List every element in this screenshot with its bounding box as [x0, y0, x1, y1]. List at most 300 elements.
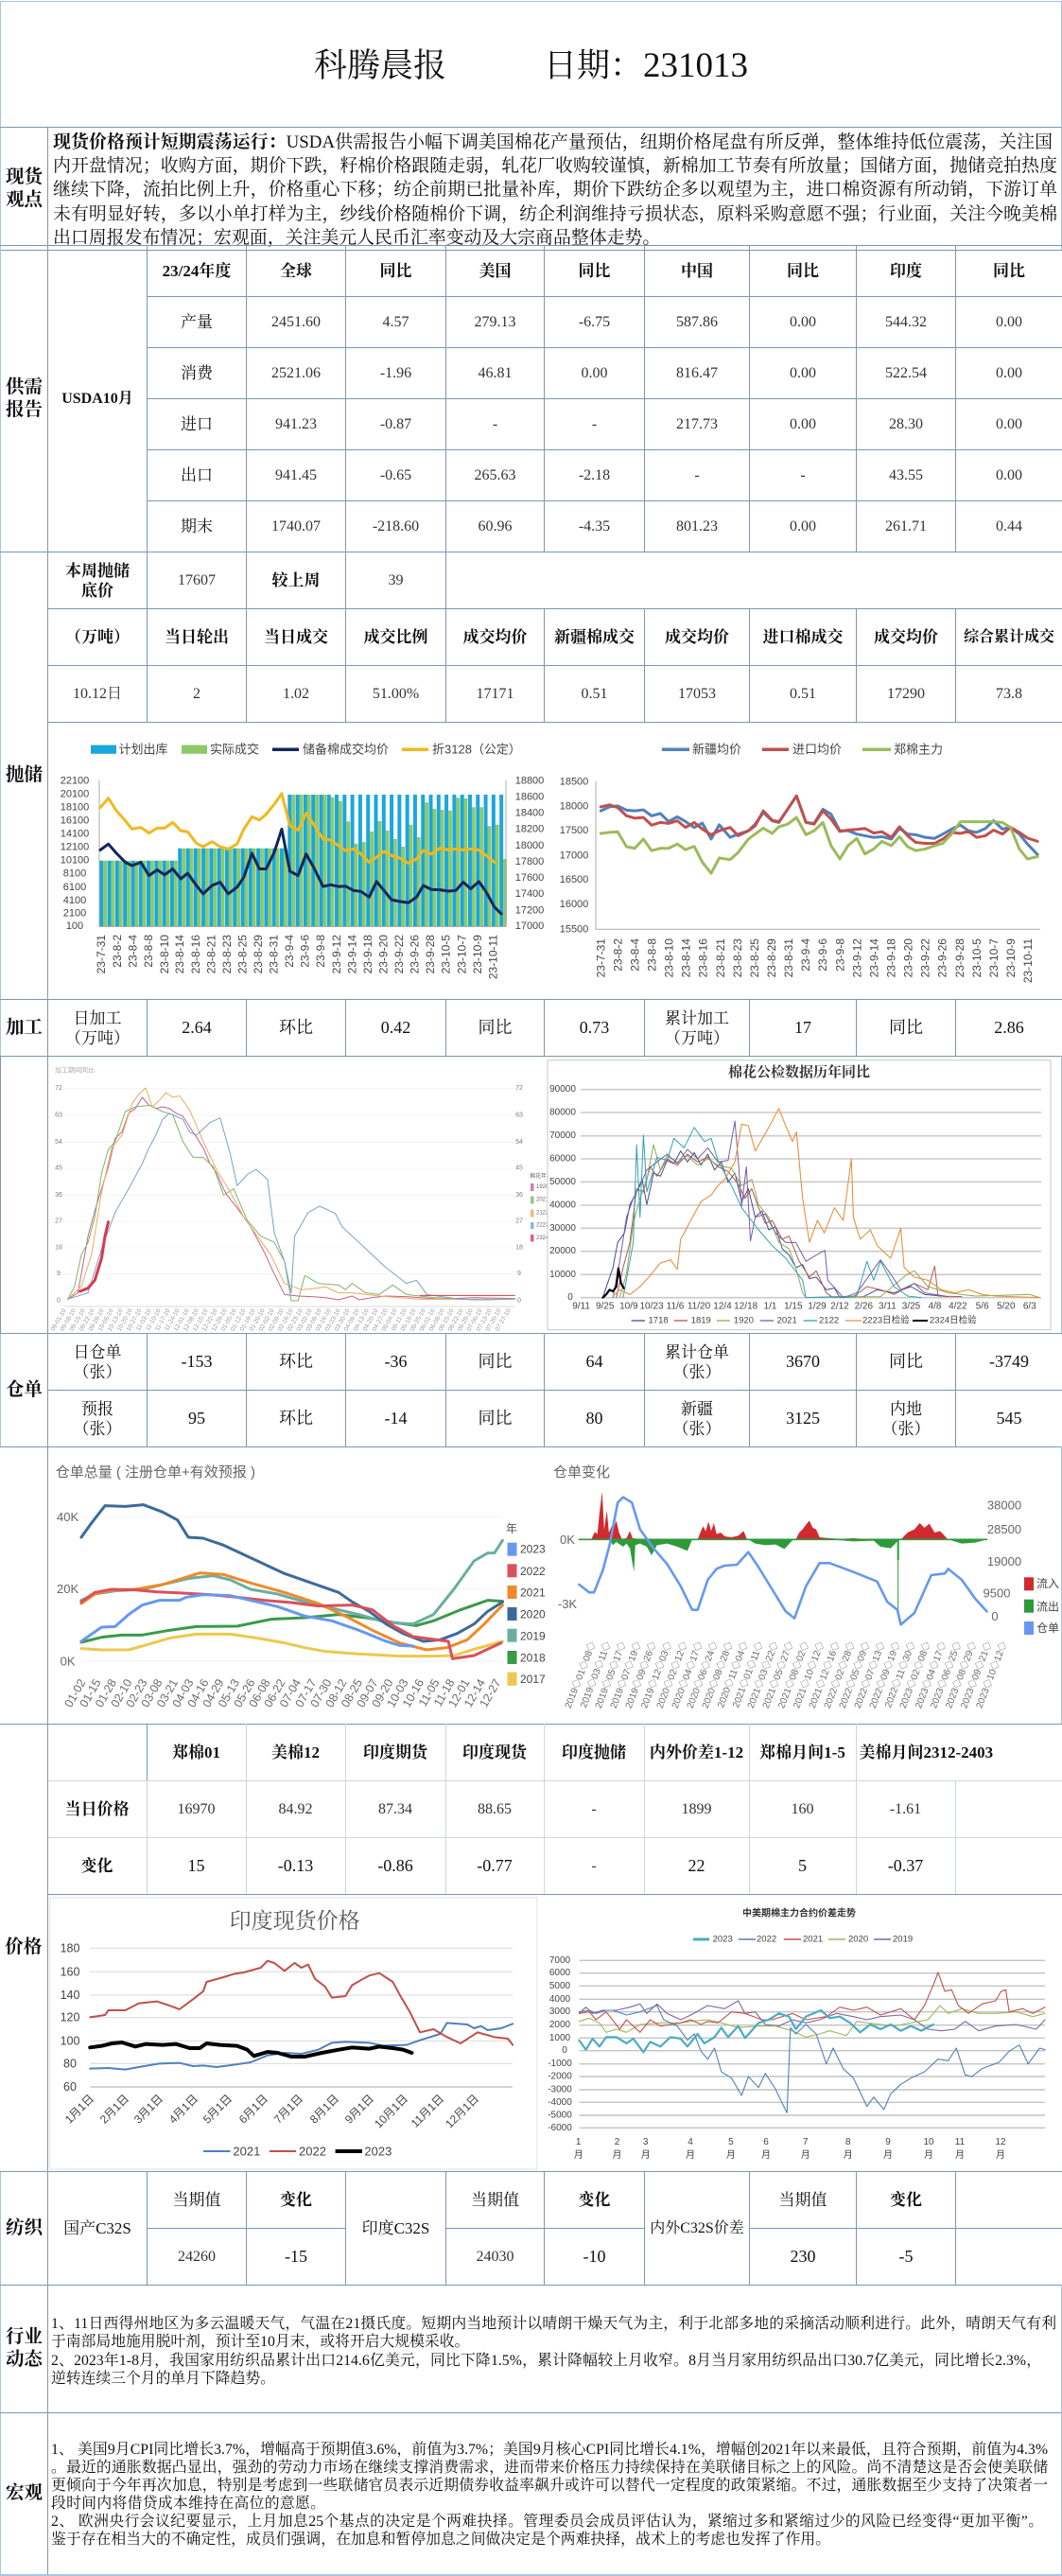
- gridlines and tick labels: 27: [55, 1218, 62, 1224]
- x axis date labels: 06-29-10: [457, 1307, 475, 1333]
- panel: supply and demand table: 0.00: [790, 518, 816, 534]
- chart legend: 2019: [893, 1934, 913, 1945]
- text block: macro news: 段时间内将借贷成本维持在高位的意愿。: [51, 2496, 325, 2512]
- x axis date labels: 02-10: [108, 1676, 135, 1709]
- panel: price table: -0.77: [477, 1856, 513, 1875]
- text block: macro news: [47, 2412, 1061, 2575]
- panel: warehouse receipts table: -36: [384, 1352, 407, 1371]
- gridlines and axes: 11/6: [667, 1302, 685, 1311]
- axis labels: 0: [991, 1609, 999, 1623]
- x axis date labels: 2023◇10◇12◇: [974, 1640, 1010, 1710]
- gridlines and tick labels: 36: [55, 1192, 62, 1199]
- chart legend: 2020: [520, 1608, 546, 1621]
- panel: supply and demand table: -4.35: [579, 518, 610, 534]
- section label: spot view: [0, 127, 47, 251]
- x axis date labels: [563, 1640, 1010, 1710]
- panel: price table: 当日价格: [64, 1800, 129, 1818]
- x axis date labels: 03-23-10: [324, 1307, 342, 1333]
- panel: supply and demand table: 同比: [380, 262, 412, 280]
- x axis date labels: 23-8-21: [714, 938, 727, 977]
- gridlines and axes: -6000: [548, 2123, 572, 2133]
- panel: supply and demand table: 0.00: [790, 314, 816, 330]
- x axis date labels: 2020◇02◇12◇: [654, 1640, 690, 1710]
- chart frame: [50, 1898, 537, 2169]
- chart legend: 进口均价: [792, 743, 842, 757]
- gridlines and axes: 月: [686, 2149, 695, 2161]
- x axis date labels: 23-9-22: [919, 938, 932, 977]
- chart legend: [632, 1315, 977, 1326]
- panel: daily processing table: 同比: [479, 1018, 513, 1037]
- gridlines and axes: -2000: [548, 2072, 572, 2081]
- panel: daily processing table: （万吨）: [65, 1029, 130, 1046]
- x axis date labels: 23-7-31: [95, 935, 108, 973]
- chart title: 仓单变化: [553, 1464, 610, 1481]
- x axis date labels: 04-13-10: [353, 1307, 371, 1333]
- x axis date labels: [95, 935, 499, 979]
- panel: supply and demand table: 60.96: [479, 518, 513, 534]
- gridlines and axes: 3: [643, 2137, 649, 2147]
- x axis date labels: 23-9-18: [885, 938, 898, 977]
- x axis date labels: 11月1日: [409, 2092, 446, 2130]
- panel: price table: -0.13: [278, 1856, 313, 1875]
- panel: reserve auction table: 本周抛储: [65, 562, 130, 579]
- panel: warehouse receipts table: [0, 1334, 1062, 1446]
- gridlines and tick labels: 18: [515, 1245, 523, 1251]
- gridlines and axes: 3/11: [879, 1302, 897, 1311]
- gridlines and axes: 2/12: [830, 1302, 849, 1311]
- chart legend: 2021: [777, 1315, 797, 1326]
- x axis date labels: 23-8-23: [731, 938, 744, 977]
- panel: price table: -: [591, 1858, 597, 1874]
- x axis date labels: 04-06-10: [343, 1307, 361, 1333]
- x axis date labels: 10-13-10: [107, 1307, 125, 1333]
- chart legend: 1920: [536, 1184, 549, 1190]
- panel: supply and demand table: -: [592, 416, 597, 432]
- x axis date labels: 01-28: [93, 1676, 119, 1709]
- x axis date labels: 07-17: [292, 1676, 320, 1709]
- x axis date labels: 07-30: [307, 1676, 335, 1709]
- gridlines and y labels: 180: [61, 1941, 79, 1954]
- panel: supply and demand table: -1.96: [380, 365, 411, 381]
- panel: reserve auction table: （万吨）: [65, 628, 130, 646]
- axis labels: -3K: [558, 1597, 577, 1611]
- x axis date labels: 09-08-10: [60, 1307, 78, 1333]
- chart legend: 2122: [819, 1315, 839, 1326]
- panel: supply and demand table: 全球: [280, 262, 312, 280]
- x axis date labels: 03-21: [154, 1676, 181, 1709]
- chart legend: 2023: [713, 1934, 733, 1945]
- panel: price table: [5, 1724, 1062, 2171]
- gridlines and axes: 9: [885, 2137, 891, 2147]
- x axis date labels: 02-16-10: [277, 1307, 295, 1333]
- chart: China US futures spread: [548, 1907, 1045, 2161]
- gridlines and axes: 2/26: [855, 1302, 873, 1311]
- panel: price table: -1.61: [890, 1801, 921, 1817]
- panel: reserve auction table: 成交均价: [874, 628, 938, 646]
- chart legend: 2023: [520, 1543, 546, 1556]
- axes and tick labels: 100: [66, 920, 83, 932]
- panel: spinning table: 印度C32S: [362, 2219, 429, 2237]
- panel: reserve auction table: 较上周: [272, 571, 320, 589]
- gridlines and axes: 月: [761, 2149, 771, 2161]
- chart legend: 新疆均价: [692, 743, 741, 757]
- chart legend: 2018: [520, 1651, 546, 1664]
- panel: daily processing table: （万吨）: [665, 1029, 729, 1046]
- axes and tick labels: 18000: [560, 800, 588, 812]
- gridlines and axes: 月: [726, 2149, 736, 2161]
- panel: supply and demand table: 2521.06: [271, 365, 321, 381]
- panel: industry news: [0, 2285, 1062, 2412]
- panel: price table: -: [591, 1801, 597, 1817]
- gridlines and tick labels: 45: [55, 1165, 62, 1171]
- x axis date labels: 23-8-25: [748, 938, 761, 977]
- panel: spinning table: -15: [285, 2247, 307, 2266]
- x axis date labels: 23-8-29: [765, 938, 778, 977]
- panel: warehouse receipts table: 同比: [479, 1352, 513, 1371]
- panel: supply and demand table: 中国: [681, 262, 713, 280]
- gridlines and axes: 月: [844, 2149, 853, 2161]
- panel: supply and demand table: 同比: [993, 262, 1025, 280]
- axes and tick labels: 16500: [560, 874, 588, 885]
- x axis date labels: 7月1日: [271, 2092, 305, 2127]
- gridlines and axes: 6: [763, 2137, 769, 2147]
- axes and tick labels: 6100: [63, 882, 86, 893]
- x axis date labels: 2020◇04◇17◇: [670, 1640, 705, 1710]
- panel: supply and demand table: 同比: [579, 262, 611, 280]
- panel: supply and demand table: -2.18: [579, 467, 610, 483]
- x axis date labels: 23-9-14: [867, 938, 880, 977]
- chart legend: [203, 2144, 392, 2159]
- axis labels: 19000: [987, 1554, 1021, 1568]
- chart legend: 2020: [848, 1934, 868, 1945]
- gridlines and axes: 5000: [549, 1981, 571, 1991]
- gridlines and axes: -1000: [548, 2059, 572, 2069]
- panel: supply and demand table: 941.23: [275, 416, 317, 432]
- text block: spot view paragraph: 未有明显好转，多以小单打样为主，纱线价格随棉价下调，纺企利润维持亏损状态，原料采购意愿不强；行业面，关注今晚美棉: [53, 204, 1057, 224]
- x axis date labels: 23-9-22: [392, 935, 406, 973]
- axes and tick labels: 22100: [61, 776, 89, 787]
- x axis date labels: 11-03-10: [135, 1307, 153, 1332]
- x axis date labels: 2023◇08◇29◇: [943, 1640, 979, 1710]
- x axis date labels: 23-9-8: [833, 938, 846, 972]
- x axis date labels: 23-10-11: [486, 935, 499, 979]
- axes and tick labels: 17000: [515, 920, 544, 932]
- panel: warehouse receipts table: 预报: [81, 1400, 113, 1417]
- text block: spot view paragraph: [47, 127, 1061, 251]
- chart legend: 流出: [1036, 1600, 1059, 1613]
- panel: supply and demand table: 522.54: [885, 365, 927, 381]
- text block: industry news: [47, 2286, 1061, 2412]
- gridlines and tick labels: [55, 1085, 523, 1306]
- gridlines and axes: [548, 1955, 1045, 2161]
- section label: spot view: 观点: [6, 189, 43, 210]
- chart legend: 郑棉主力: [894, 743, 943, 757]
- gridlines and y labels: 60: [63, 2080, 77, 2094]
- x axis date labels: 10-03: [384, 1676, 411, 1709]
- inspection lines: [602, 1109, 1039, 1298]
- panel: warehouse receipts table: （张）: [881, 1419, 931, 1438]
- x axis date labels: 2019◇07◇19◇: [608, 1640, 644, 1710]
- x axis date labels: 12-29-10: [211, 1307, 229, 1333]
- x axis date labels: 06-22: [261, 1676, 288, 1709]
- gridlines and axes: 月: [955, 2149, 965, 2161]
- axes and tick labels: 15500: [560, 923, 588, 935]
- chart legend: 2017: [520, 1673, 546, 1686]
- x axis date labels: 04-20-10: [362, 1307, 380, 1333]
- panel: price table: 16970: [178, 1801, 216, 1817]
- panel: supply and demand table: 279.13: [475, 314, 516, 330]
- panel: daily processing table: 累计加工: [665, 1008, 729, 1027]
- panel: reserve auction table: [0, 552, 1062, 999]
- panel: warehouse receipts table: -14: [384, 1409, 407, 1428]
- chart legend: [1024, 1577, 1059, 1635]
- axes and tick labels: 12100: [61, 842, 89, 853]
- x axis date labels: 03-09-10: [305, 1307, 323, 1333]
- x axis date labels: 01-19-10: [239, 1307, 257, 1333]
- gridlines and axes: -3000: [548, 2085, 572, 2094]
- axes and tick labels: 10100: [61, 855, 89, 867]
- gridlines and y labels: 100: [61, 2034, 79, 2047]
- gridlines and axes: 3000: [549, 2006, 571, 2017]
- chart legend: 2022: [520, 1565, 546, 1578]
- x axis date labels: 23-9-6: [299, 935, 312, 968]
- panel: warehouse receipts table: 95: [188, 1409, 205, 1428]
- panel: price table: 87.34: [378, 1801, 412, 1817]
- gridlines and y labels: 20K: [57, 1582, 78, 1596]
- axes and tick labels: 17000: [560, 850, 588, 861]
- panel: supply and demand table: -6.75: [579, 314, 610, 330]
- panel: supply and demand table: -: [800, 467, 806, 483]
- axes and tick labels: 18800: [515, 776, 544, 787]
- axes and tick labels: 8100: [63, 868, 86, 880]
- panel: supply and demand table: 0.00: [996, 467, 1022, 483]
- gridlines and axes: 0: [562, 2045, 567, 2056]
- panel: macro news: [0, 2412, 1062, 2576]
- x axis date labels: 01-12-10: [230, 1307, 248, 1333]
- x axis date labels: 23-9-20: [376, 935, 390, 973]
- panel: price table: -0.37: [888, 1856, 923, 1875]
- gridlines and axes: 月: [613, 2149, 622, 2161]
- panel: warehouse receipts table: -153: [182, 1352, 212, 1371]
- chart legend: 2021: [520, 1586, 546, 1600]
- section label: processing: [0, 999, 47, 1056]
- x axis date labels: 2021◇05◇27◇: [760, 1640, 796, 1710]
- x axis date labels: 23-9-18: [361, 935, 374, 973]
- x axis date labels: 23-9-28: [424, 935, 437, 973]
- section label: spinning: [0, 2172, 47, 2286]
- x axis date labels: 10-16: [400, 1676, 427, 1709]
- gridlines and axes: 月: [801, 2149, 810, 2161]
- panel: warehouse receipts table: 80: [586, 1409, 603, 1428]
- x axis date labels: 02-02-10: [258, 1307, 276, 1333]
- gridlines and axes: 10/23: [639, 1302, 664, 1311]
- panel: reserve auction table: 当日成交: [264, 628, 328, 646]
- panel: price table: 22: [688, 1856, 705, 1875]
- panel: warehouse receipts table: 3125: [786, 1409, 820, 1428]
- chart legend: 年: [506, 1522, 517, 1535]
- x axis date labels: 03-30-10: [334, 1307, 352, 1333]
- panel: warehouse receipts table: 同比: [889, 1352, 923, 1371]
- bars: planned and actual: [99, 797, 505, 926]
- panel: supply and demand table: 0.00: [790, 416, 816, 432]
- axes and tick labels: 16100: [61, 815, 89, 827]
- gridlines and tick labels: 0: [517, 1298, 521, 1304]
- text block: industry news: 于南部局地施用脱叶剂，预计至10月末，或将开启大规模采收。: [51, 2334, 469, 2350]
- x axis date labels: 9月1日: [342, 2092, 376, 2127]
- x axis date labels: 23-10-5: [440, 935, 453, 973]
- axis labels: 9500: [984, 1586, 1010, 1601]
- panel: supply and demand table: 0.00: [581, 365, 607, 381]
- gridlines and axes: 90000: [549, 1084, 576, 1095]
- x axis date labels: 02-09-10: [268, 1307, 286, 1333]
- gridlines and axes: 40000: [549, 1200, 576, 1211]
- gridlines and axes: 9/11: [572, 1302, 590, 1311]
- x axis date labels: 01-15: [77, 1676, 104, 1709]
- section label: reserve auction: [0, 552, 47, 999]
- panel: supply and demand table: 816.47: [676, 365, 718, 381]
- x axis date labels: 8月1日: [307, 2092, 341, 2127]
- chart legend: 2021: [803, 1934, 823, 1945]
- x axis date labels: 23-10-7: [987, 938, 1001, 977]
- x axis date labels: 23-9-14: [345, 935, 358, 973]
- gridlines and axes: 7000: [549, 1955, 571, 1966]
- x axis date labels: 07-20-10: [485, 1307, 503, 1333]
- chart: India spot price: [50, 1898, 537, 2169]
- gridlines and y labels: 120: [61, 2011, 79, 2024]
- panel: supply and demand table: 46.81: [479, 365, 513, 381]
- panel: price table: 内外价差1-12: [650, 1744, 743, 1761]
- panel: daily processing table: 环比: [279, 1018, 313, 1037]
- x axis date labels: 03-08: [138, 1676, 165, 1709]
- panel: reserve auction table: 73.8: [996, 686, 1022, 702]
- gridlines and axes: 1/15: [784, 1302, 803, 1311]
- x axis date labels: 2020◇08◇28◇: [700, 1640, 736, 1710]
- x axis date labels: 10-20-10: [116, 1307, 134, 1333]
- panel: warehouse receipts table: 新疆: [681, 1400, 713, 1417]
- x axis date labels: 23-8-4: [127, 935, 140, 968]
- x axis date labels: 2020◇06◇24◇: [685, 1640, 721, 1710]
- panel: price table: 1899: [681, 1801, 711, 1817]
- section label: spot view: 现货: [6, 166, 43, 187]
- chart legend: 1718: [649, 1315, 669, 1326]
- gridlines and axes: 12: [995, 2137, 1006, 2147]
- gridlines and axes: 1/1: [764, 1302, 777, 1311]
- panel: reserve auction table: 成交均价: [463, 628, 528, 646]
- axis labels: 0K: [560, 1533, 575, 1547]
- x axis date labels: 12月1日: [443, 2092, 481, 2130]
- x axis date labels: 11-05: [416, 1676, 443, 1709]
- gridlines and tick labels: 36: [515, 1192, 523, 1199]
- x axis date labels: 2020◇11◇04◇: [715, 1640, 751, 1709]
- chart: warehouse receipts by year: [56, 1464, 546, 1709]
- section label: macro: [0, 2412, 47, 2575]
- chart legend: 2122: [536, 1211, 549, 1217]
- price lines: [90, 1961, 513, 2070]
- panel: supply and demand table: 出口: [181, 466, 213, 484]
- panel: spot view: [0, 127, 1062, 251]
- axes and tick labels: 17200: [515, 904, 544, 916]
- gridlines and y labels: 40K: [57, 1510, 78, 1524]
- x axis date labels: 06-22-10: [447, 1307, 465, 1333]
- panel: reserve auction table: 17607: [178, 572, 216, 588]
- panel: supply and demand table: 同比: [787, 262, 819, 280]
- panel: supply and demand table: 0.44: [996, 518, 1022, 534]
- x axis date labels: 04-03: [169, 1676, 197, 1709]
- gridlines and axes: 月: [641, 2149, 651, 2161]
- x axis date labels: 08-12: [322, 1676, 350, 1709]
- gridlines and y labels: 0K: [61, 1654, 76, 1669]
- panel: supply and demand table: 进口: [181, 415, 213, 433]
- x axis date labels: 2019◇09◇26◇: [623, 1640, 659, 1710]
- panel: supply and demand table: 217.73: [676, 416, 718, 432]
- x axis date labels: 23-9-26: [936, 938, 949, 977]
- panel: reserve auction table: 2: [193, 686, 200, 702]
- chart legend: [530, 1172, 552, 1241]
- x axis date labels: 11-24-10: [164, 1307, 182, 1332]
- x axis date labels: 09-15-10: [69, 1307, 87, 1333]
- axes and tick labels: 17600: [515, 872, 544, 884]
- x axis date labels: 02-23: [123, 1676, 150, 1709]
- panel: supply and demand table: -0.87: [380, 416, 411, 432]
- panel: warehouse receipts table: 日仓单: [74, 1343, 121, 1360]
- gridlines and axes: -4000: [548, 2097, 572, 2108]
- panel: supply and demand table: 4.57: [382, 314, 409, 330]
- chart legend: 计划出库: [119, 743, 168, 757]
- x axis date labels: 2022◇02◇28◇: [822, 1640, 858, 1710]
- x axis date labels: 12-01-10: [173, 1307, 191, 1333]
- panel: supply and demand table: 2451.60: [271, 314, 321, 330]
- gridlines and axes: 月: [883, 2149, 893, 2161]
- chart legend: 棉花年度: [530, 1172, 552, 1180]
- chart title: 棉花公检数据历年同比: [728, 1063, 870, 1080]
- gridlines and axes: 5: [728, 2137, 734, 2147]
- panel: daily processing table: 0.42: [381, 1018, 410, 1037]
- x axis date labels: 01-05-10: [220, 1307, 238, 1333]
- x axis date labels: 11-18: [431, 1676, 458, 1709]
- panel: supply and demand table: 0.00: [790, 365, 816, 381]
- x axis date labels: 6月1日: [236, 2092, 270, 2127]
- panel: supply and demand table: 265.63: [475, 467, 516, 483]
- panel: daily processing table: 17: [794, 1018, 811, 1037]
- x axis date labels: 10-06-10: [97, 1307, 115, 1333]
- section label: industry news: [0, 2286, 47, 2412]
- gridlines and y labels: 140: [61, 1989, 79, 2002]
- gridlines and tick labels: 63: [515, 1113, 523, 1118]
- x axis date labels: 01-26-10: [249, 1307, 267, 1333]
- axes and tick labels: 2100: [63, 908, 86, 920]
- panel: supply and demand table: 印度: [890, 262, 922, 280]
- x axis date labels: 01-02: [61, 1676, 89, 1709]
- section label: warehouse receipts: [0, 1334, 47, 1447]
- x axis date labels: 1月1日: [62, 2092, 96, 2127]
- chart legend: [662, 743, 943, 757]
- gridlines and axes: 20000: [549, 1246, 576, 1256]
- panel: spinning table: [0, 2172, 1062, 2285]
- panel: supply and demand table: 43.55: [889, 467, 923, 483]
- axis labels: 28500: [987, 1522, 1021, 1536]
- USDA label: [47, 246, 148, 552]
- x axis date labels: 3月1日: [131, 2092, 165, 2127]
- gridlines and y labels: [61, 1941, 513, 2094]
- gridlines and axes: 12/18: [734, 1302, 758, 1311]
- gridlines and tick labels: 0: [57, 1298, 61, 1304]
- chart legend: 实际成交: [210, 743, 259, 757]
- x axis date labels: 2022◇05◇09◇: [837, 1640, 873, 1710]
- x axis date labels: 2019◇03◇11◇: [578, 1640, 614, 1709]
- chart legend: [693, 1934, 913, 1945]
- panel: daily processing table: 同比: [889, 1018, 923, 1037]
- gridlines and axes: 1/29: [808, 1302, 827, 1311]
